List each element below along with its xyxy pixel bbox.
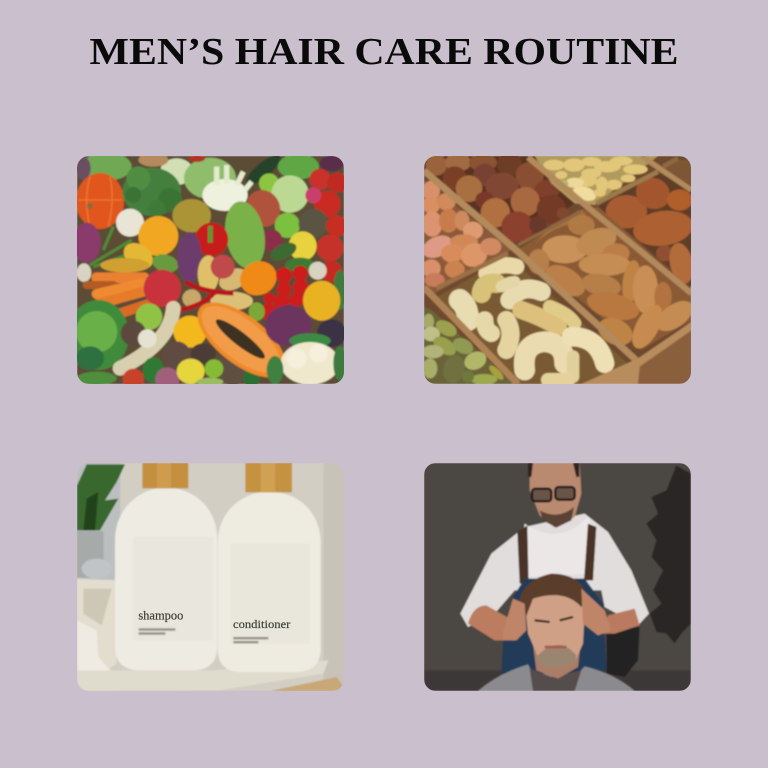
- yellow pepper: [173, 316, 207, 348]
- pine nuts: [535, 156, 658, 205]
- barber: [460, 463, 649, 677]
- broccoli: [122, 166, 182, 217]
- peanuts: [419, 180, 511, 293]
- potatoes and radish: [182, 255, 253, 310]
- shampoo label: shampoo: [138, 609, 183, 623]
- wooden box dividers: [424, 156, 691, 384]
- conditioner label: conditioner: [233, 617, 290, 631]
- eggplant: [177, 232, 202, 283]
- red bell pepper: [195, 223, 228, 256]
- papaya half: [196, 302, 284, 378]
- barber forearms: [468, 605, 515, 640]
- fennel: [202, 165, 252, 211]
- hazelnuts: [424, 152, 575, 243]
- cauliflower: [267, 333, 347, 385]
- red apple: [144, 270, 181, 307]
- purple cabbage: [265, 305, 312, 346]
- panel: shampoo and conditioner photo: [77, 463, 344, 691]
- panel: vegetables photo: [68, 150, 347, 391]
- barber head: [528, 463, 581, 528]
- mango: [172, 199, 211, 232]
- almonds: [518, 207, 698, 353]
- dark plum: [317, 319, 346, 347]
- red chilies: [175, 282, 233, 311]
- plant and vase: [77, 464, 125, 579]
- orange pepper: [240, 260, 278, 296]
- panel: nuts photo: [419, 152, 698, 386]
- radicchio and spring onion: [73, 223, 132, 282]
- garlic: [116, 209, 144, 237]
- mushroom: [309, 262, 327, 280]
- title: MEN’S HAIR CARE ROUTINE: [90, 31, 678, 73]
- towel: [77, 579, 344, 691]
- lettuce: [224, 200, 266, 268]
- carrots: [87, 278, 148, 313]
- cherry tomatoes: [249, 258, 315, 321]
- lower produce: [122, 340, 260, 384]
- long root vegetable: [120, 308, 173, 368]
- seated client: [478, 574, 635, 691]
- yellow orange: [138, 216, 178, 256]
- cashews: [438, 257, 631, 384]
- large yellow lemon: [303, 281, 340, 321]
- wooden box front corner: [585, 320, 692, 384]
- top right wood cell and pecans: [598, 160, 697, 287]
- caps and bottle bodies: [115, 488, 217, 670]
- pumpkin seeds: [422, 307, 515, 386]
- top leaves and greens: [77, 156, 344, 199]
- plant silhouette: [646, 465, 691, 644]
- barber hands: [503, 589, 611, 640]
- corn and small cucumber: [99, 242, 179, 274]
- infographic canvas: [77, 38, 691, 691]
- top right produce: [240, 169, 347, 310]
- green cabbage: [77, 299, 128, 384]
- green apple: [136, 303, 162, 330]
- pumpkin: [76, 173, 124, 229]
- panel: scalp massage photo: [424, 463, 691, 691]
